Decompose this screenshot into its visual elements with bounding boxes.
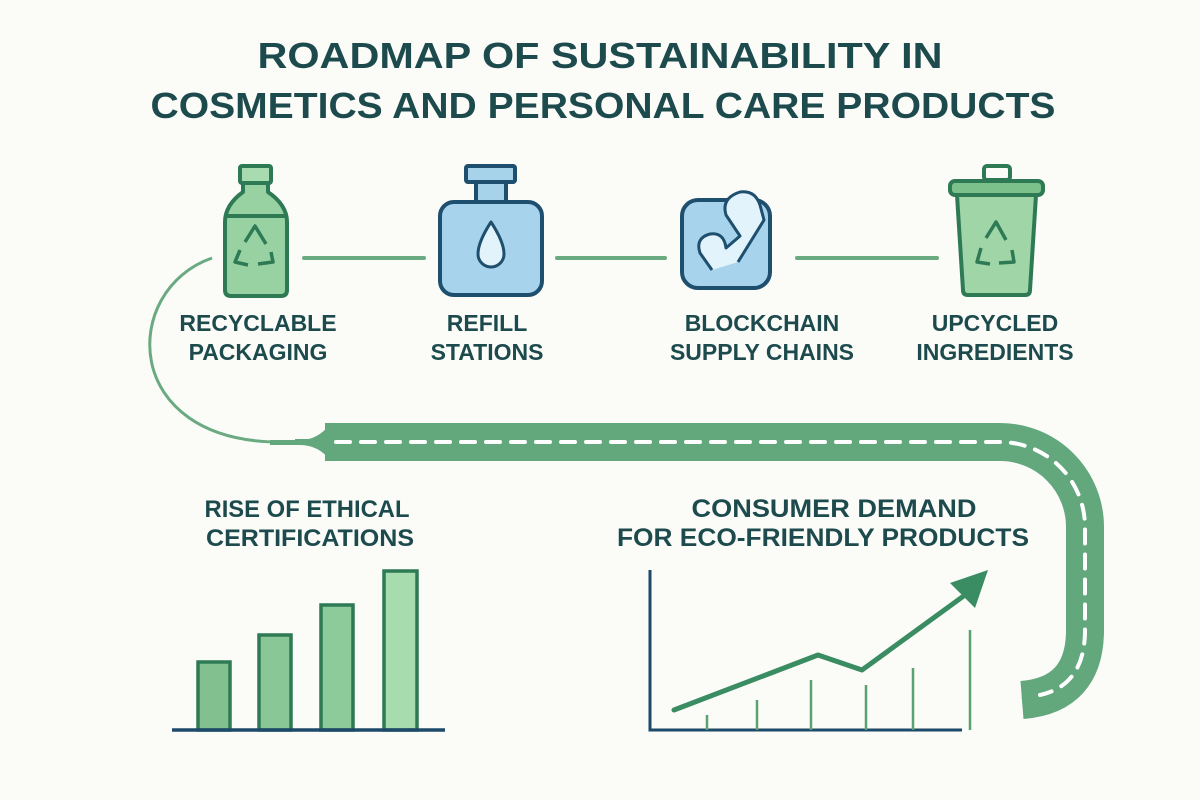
label: refill stations bbox=[431, 310, 543, 365]
heading: consumer demand bbox=[617, 495, 1029, 552]
label: refill stations: STATIONS bbox=[431, 339, 543, 365]
heading: rise of ethical certifications bbox=[204, 496, 414, 552]
title: ROADMAP OF SUSTAINABILITY IN bbox=[258, 35, 942, 76]
label: recyclable packaging: RECYCLABLE bbox=[179, 310, 337, 336]
icon: refill bottle bbox=[440, 166, 542, 295]
label: blockchain: SUPPLY CHAINS bbox=[670, 339, 854, 365]
bar chart bbox=[172, 571, 445, 730]
title bbox=[150, 35, 1056, 126]
title: COSMETICS AND PERSONAL CARE PRODUCTS bbox=[150, 85, 1056, 126]
label: upcycled ingredients bbox=[916, 310, 1074, 365]
line chart bbox=[650, 570, 988, 730]
icon: recyclable bottle bbox=[225, 166, 287, 296]
icon: trash bin bbox=[950, 166, 1043, 295]
icon: blockchain bbox=[682, 192, 770, 288]
connector lines bbox=[304, 256, 937, 260]
heading: consumer demand: CONSUMER DEMAND bbox=[692, 495, 976, 523]
label: blockchain bbox=[670, 310, 854, 365]
heading: consumer demand: FOR ECO-FRIENDLY PRODUCTS bbox=[617, 524, 1029, 552]
label: upcycled ingredients: INGREDIENTS bbox=[916, 339, 1074, 365]
label: upcycled ingredients: UPCYCLED bbox=[932, 310, 1058, 336]
label: blockchain: BLOCKCHAIN bbox=[685, 310, 839, 336]
heading: rise of ethical certifications: CERTIFICATIONS bbox=[206, 525, 414, 552]
heading: rise of ethical certifications: RISE OF ETHICAL bbox=[204, 496, 410, 523]
road path bbox=[150, 258, 1085, 700]
label: recyclable packaging bbox=[179, 310, 337, 365]
label: refill stations: REFILL bbox=[447, 310, 527, 336]
label: recyclable packaging: PACKAGING bbox=[189, 339, 327, 365]
